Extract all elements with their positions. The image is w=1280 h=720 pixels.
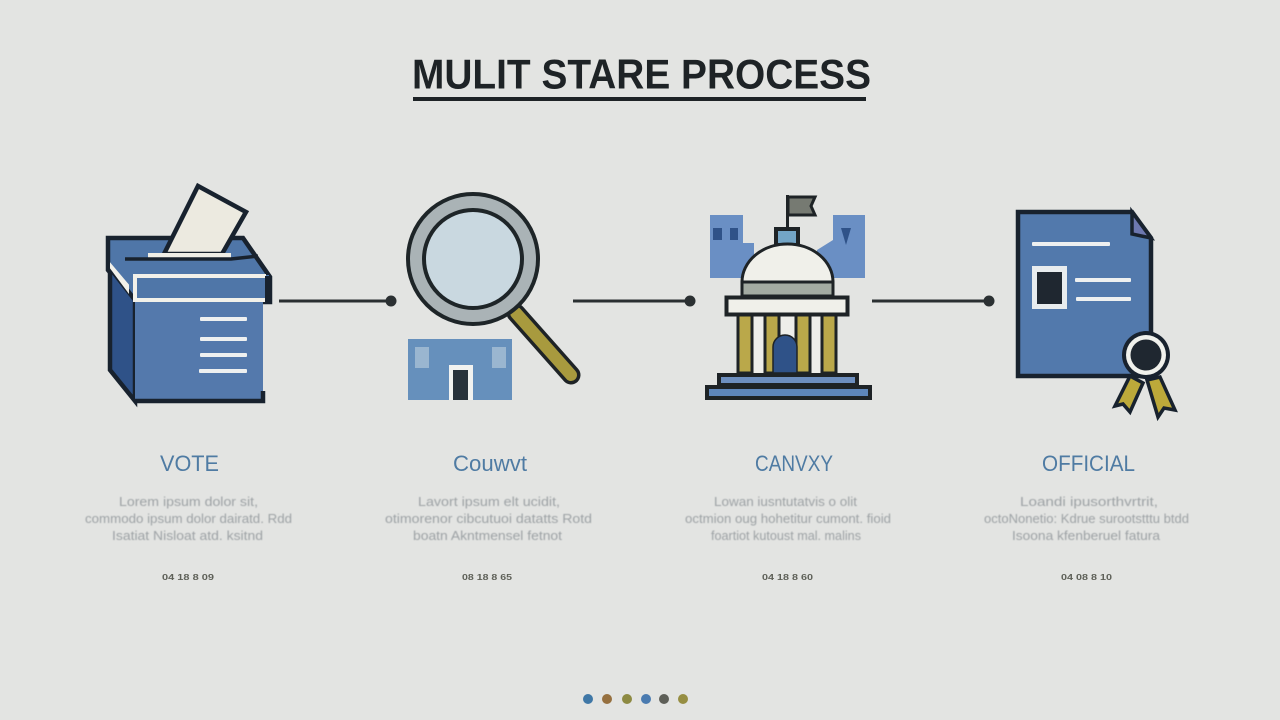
icon: magnifier over building — [408, 194, 571, 400]
step 4: official — [984, 212, 1189, 582]
date: canvass: 04 18 8 60 — [762, 573, 814, 582]
step 2: count — [385, 194, 592, 582]
date: official: 04 08 8 10 — [1061, 573, 1113, 582]
description: official — [984, 495, 1189, 543]
arrow: canvass to official — [872, 296, 994, 306]
title: MULIT STARE PROCESS — [412, 50, 871, 98]
description: count — [385, 495, 592, 543]
icon: ballot box — [108, 186, 270, 401]
label: count: Couwvt — [453, 451, 527, 476]
arrow: vote to count — [279, 296, 396, 306]
description: canvass: Lowan iusntutatvis o olit — [714, 495, 858, 509]
step 3: canvass — [685, 195, 891, 582]
icon: capitol building — [707, 195, 870, 398]
arrow: count to canvass — [573, 296, 696, 306]
icon: certified document — [1018, 212, 1175, 417]
description: vote — [85, 495, 292, 543]
description: canvass: octmion oug hohetitur cumont. fioid — [685, 512, 891, 526]
description: canvass: foartiot kutoust mal. malins — [711, 529, 861, 543]
date: vote: 04 18 8 09 — [162, 573, 215, 582]
description: count: Lavort ipsum elt ucidit, — [418, 495, 560, 509]
description: official: Loandi ipusorthvrtrit, — [1020, 495, 1158, 509]
pagination dots — [583, 694, 688, 704]
label: official: OFFICIAL — [1042, 451, 1135, 476]
date: count: 08 18 8 65 — [462, 573, 513, 582]
label: canvass: CANVXY — [755, 451, 833, 476]
description: official: octoNonetio: Kdrue surootstttu btdd — [984, 512, 1189, 526]
label: vote: VOTE — [160, 451, 219, 476]
description: vote: Lorem ipsum dolor sit, — [119, 495, 258, 509]
description: count: boatn Akntmensel fetnot — [413, 529, 563, 543]
step 1: vote — [85, 186, 292, 582]
description: count: otimorenor cibcutuoi datatts Rotd — [385, 512, 592, 526]
description: vote: commodo ipsum dolor dairatd. Rdd — [85, 512, 292, 526]
description: official: Isoona kfenberuel fatura — [1012, 529, 1160, 543]
description: canvass — [685, 495, 891, 543]
description: vote: Isatiat Nisloat atd. ksitnd — [112, 529, 263, 543]
